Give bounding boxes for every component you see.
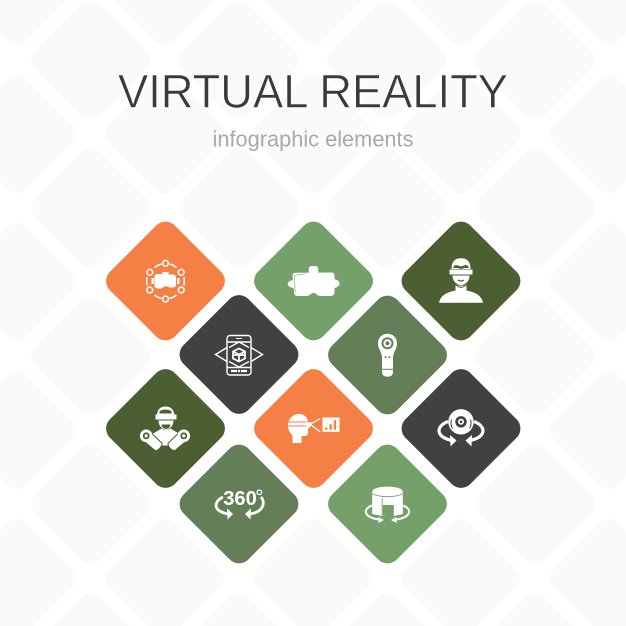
panel: AR smartphone (180, 295, 298, 414)
icon: head viewing chart (288, 414, 340, 443)
panel: user with two controllers (106, 369, 225, 488)
panel: 360 view (180, 445, 298, 563)
icon: headset ring (147, 260, 184, 302)
panel: 360 degree camera (402, 369, 520, 488)
panel: VR user portrait (402, 222, 520, 340)
panel: motion controller (328, 296, 447, 414)
icon: 360 with arrows: 360 (223, 487, 257, 510)
icon: cylinder with arrows (366, 487, 409, 523)
icon: smartphone with cube (216, 336, 262, 375)
icon: goggles (288, 266, 340, 296)
panel: VR goggles (254, 222, 373, 340)
icon: camera sphere with arrows (439, 409, 483, 446)
title: VIRTUAL REALITY (118, 64, 508, 118)
panel: panoramic cylinder (328, 445, 447, 563)
panel: VR headset with orbit nodes (106, 222, 225, 340)
icon: man with controllers (137, 406, 193, 453)
panel: VR data visualisation (254, 369, 373, 488)
icon: man with headset (439, 258, 483, 303)
subtitle: infographic elements (212, 126, 414, 152)
icon: controller (378, 334, 397, 377)
